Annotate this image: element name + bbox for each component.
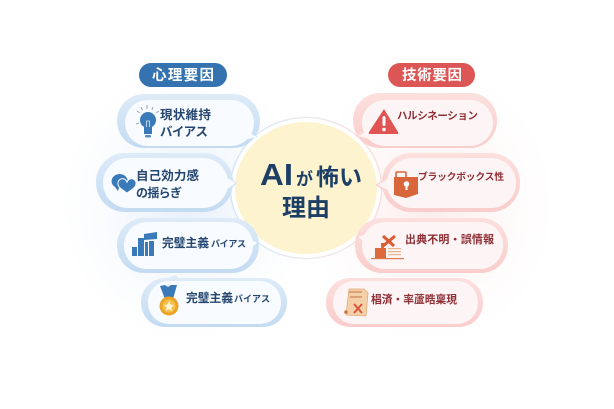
panel: ブラックボックス性	[375, 153, 520, 212]
panel: 椙済・率蘆晧稟現	[326, 278, 483, 327]
text: 完璧主義	[162, 236, 209, 250]
text: 椙済・率蘆晧稟現	[371, 292, 457, 306]
text line 2: の揺らぎ	[136, 185, 182, 200]
heading pill: 心理要因	[139, 63, 227, 87]
panel: 現状維持バイアス	[117, 94, 260, 148]
icon: document with X	[371, 236, 404, 259]
icon: light bulb	[136, 105, 159, 138]
center title line 1 suffix: が	[296, 169, 313, 189]
text: 自己効力感	[136, 168, 199, 183]
text line 2: バイアス	[160, 125, 208, 139]
text suffix: バイアス	[211, 239, 246, 249]
panel: ハルシネーション	[353, 93, 497, 148]
heading pill: 技術要因: 技術要因	[402, 67, 462, 84]
icon: gold medal	[160, 285, 178, 316]
icon: warning triangle	[369, 109, 398, 134]
text: 完璧主義	[186, 291, 233, 305]
heading pill: 心理要因: 心理要因	[152, 67, 214, 84]
panel: 自己効力感の揺らぎ	[96, 153, 237, 212]
center title line 1 end: 怖い	[316, 164, 362, 190]
icon: scroll with X	[344, 289, 368, 316]
text: 出典不明・誤情報	[405, 232, 494, 246]
center circle: AIが怖い理由	[230, 117, 382, 259]
text: ブラックボックス性	[418, 170, 504, 183]
center title line 1: AI	[260, 157, 293, 192]
panel: 出典不明・誤情報	[355, 218, 508, 273]
icon: bar chart	[132, 232, 157, 256]
text: ハルシネーション	[397, 110, 478, 122]
center title line 2: 理由	[282, 195, 330, 222]
icon: speech bubble and heart	[112, 174, 136, 193]
text: 現状維持	[160, 107, 211, 122]
icon: black box with keyhole	[394, 172, 418, 198]
panel: 完璧主義バイアス (bar chart)	[117, 218, 259, 273]
panel: 完璧主義バイアス (medal)	[141, 275, 287, 327]
text suffix: バイアス	[234, 294, 270, 304]
heading pill: 技術要因	[388, 63, 475, 87]
